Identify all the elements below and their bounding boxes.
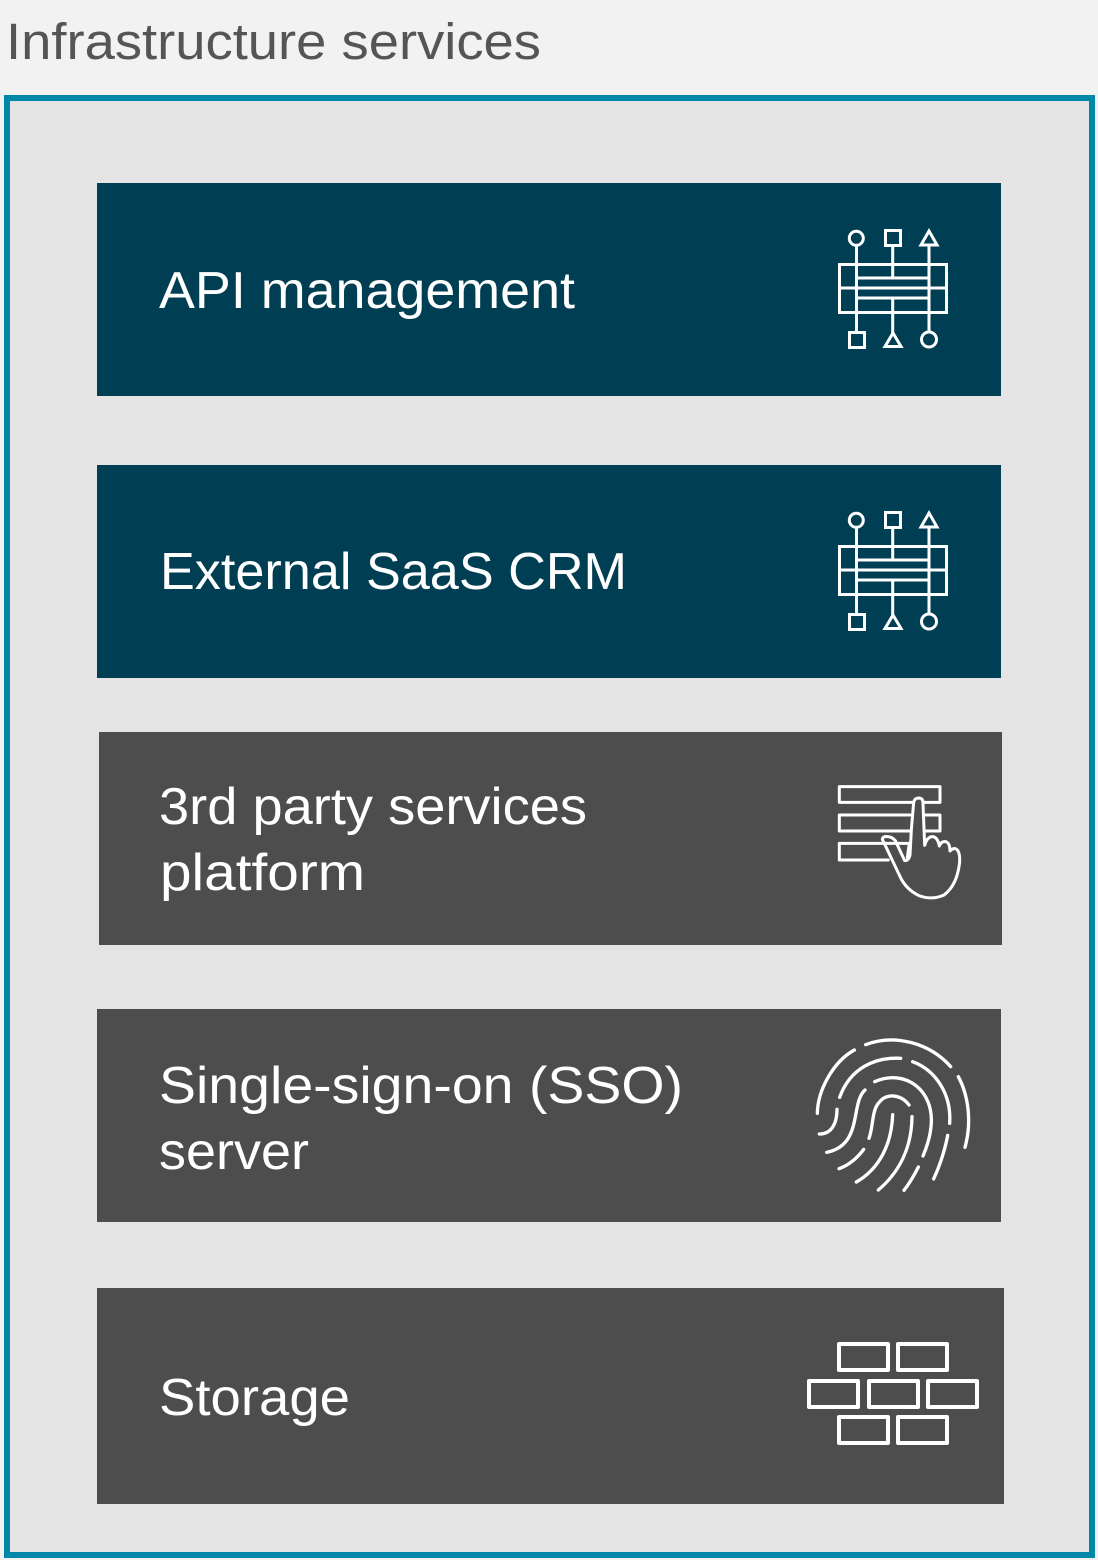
icon: API connections <box>839 512 947 630</box>
label: 3rd party services platform: platform <box>160 844 365 902</box>
label: External SaaS CRM: External SaaS CRM <box>160 543 627 601</box>
icon: brick wall <box>809 1344 977 1443</box>
label: API management: API management <box>159 262 576 320</box>
panel: External SaaS CRM <box>97 465 1001 678</box>
label: Storage: Storage <box>159 1369 350 1427</box>
icon: fingerprint <box>817 1040 969 1190</box>
panel: Storage <box>97 1288 1004 1504</box>
panel: API management <box>97 183 1001 396</box>
label: Single-sign-on (SSO) server: Single-sign-on (SSO) <box>159 1057 683 1115</box>
icon: hand selecting from list <box>839 787 960 898</box>
label: Single-sign-on (SSO) server: server <box>159 1123 309 1181</box>
icon: API connections <box>839 230 947 348</box>
label: 3rd party services platform: 3rd party services <box>159 778 587 836</box>
panel: 3rd party services platform <box>99 732 1002 945</box>
title: Infrastructure services <box>6 13 541 70</box>
panel: Single-sign-on (SSO) server <box>97 1009 1001 1222</box>
